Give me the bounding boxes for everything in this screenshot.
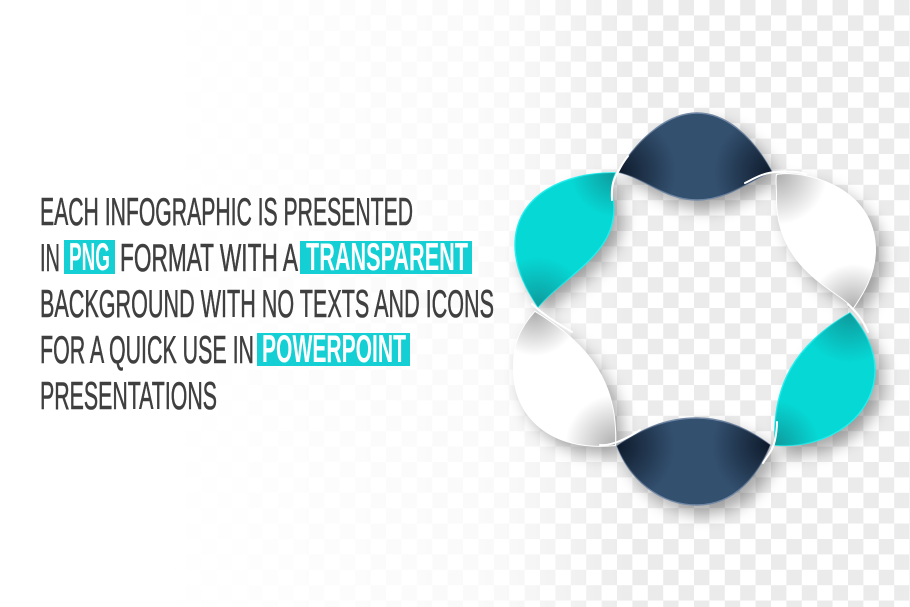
petal: lower-right teal [774,312,876,446]
line 2: IN: IN [40,237,60,280]
line 2: format with a: FORMAT WITH A [120,237,298,280]
highlight: powerpoint [257,328,410,371]
line 1: EACH INFOGRAPHIC IS PRESENTED [40,191,413,234]
petal: lower-left white [513,311,616,447]
petal: bottom navy [616,417,771,506]
line 3: BACKGROUND WITH NO TEXTS AND ICONS [40,283,494,326]
petal: right white [776,173,876,308]
highlight: PNG: PNG [69,236,110,279]
petal: left teal [514,172,616,308]
line 5: PRESENTATIONS [40,375,217,418]
white ribbon crossings [532,156,868,463]
line 4: FOR A QUICK USE IN [40,329,254,372]
highlight: transparent [300,236,472,279]
petal ring diagram [488,113,900,514]
background: transparency checkerboard [526,0,910,607]
highlight: transparent: TRANSPARENT [306,236,468,279]
text block [40,191,494,418]
petal: top navy [618,112,772,201]
petal shadows [522,122,883,514]
highlight: powerpoint: POWERPOINT [262,328,406,371]
highlight: PNG [64,236,115,279]
